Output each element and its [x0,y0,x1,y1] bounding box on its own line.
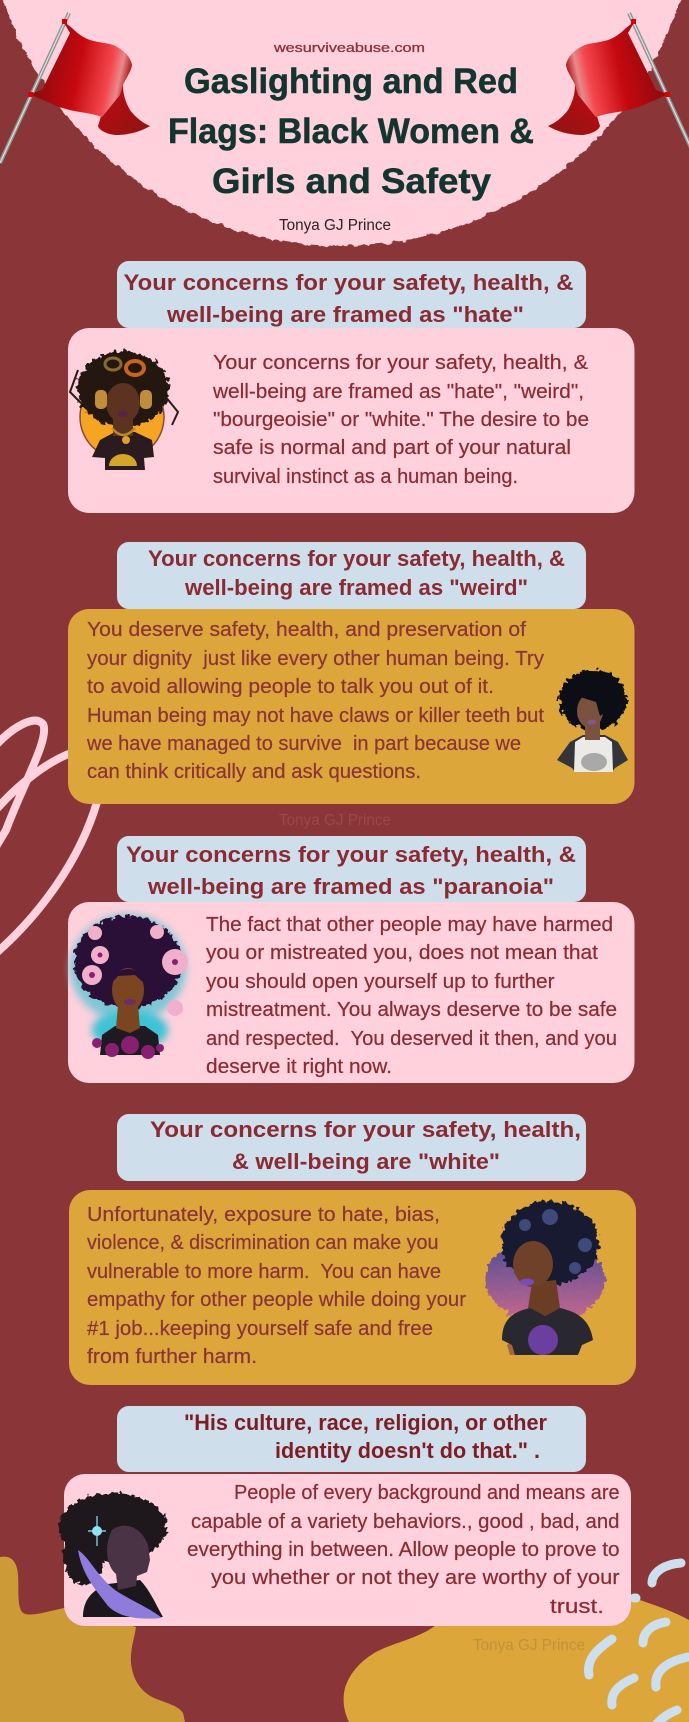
section 5 heading: "His culture, race, religion, or other [184,1410,547,1435]
icon: right red flag [548,13,689,163]
section 4 heading: Your concerns for your safety, health, [150,1117,581,1142]
section 3 text: The fact that other people may have harmed [206,914,613,936]
section 1 text: survival instinct as a human being. [213,466,518,488]
section 2 text: to avoid allowing people to talk you out of it. [87,676,494,698]
section 4 text: from further harm. [87,1346,257,1368]
section 4 panel [69,1190,636,1385]
section 1 heading: well-being are framed as "hate" [166,302,524,327]
section 2 heading [117,542,586,609]
section 5 panel [59,1474,631,1626]
watermark 1: Tonya GJ Prince [279,812,391,829]
section 2 heading: Your concerns for your safety, health, & [148,546,565,571]
title: Flags: Black Women & [168,112,534,151]
section 4 text: vulnerable to more harm. You can have [87,1261,441,1283]
section 4 text: Unfortunately, exposure to hate, bias, [87,1204,440,1226]
section 2 text: we have managed to survive in part because we [86,733,521,755]
section 4 text: #1 job...keeping yourself safe and free [87,1318,433,1340]
section 2 text: can think critically and ask questions. [87,761,421,783]
section 1 portrait [70,351,178,470]
section 1 heading: Your concerns for your safety, health, & [124,270,574,295]
section 1 text [212,352,589,488]
section 4 text: violence, & discrimination can make you [87,1232,438,1254]
section 5 heading: identity doesn't do that." . [275,1438,540,1463]
section 1 text: Your concerns for your safety, health, & [213,352,589,374]
watermark 2: Tonya GJ Prince [473,1637,585,1654]
section 5 heading [117,1406,586,1472]
section 2 text: You deserve safety, health, and preservation of [87,619,526,641]
title: Gaslighting and Red [184,62,518,101]
section 1 text: "bourgeoisie" or "white." The desire to be [213,409,589,431]
section 3 text: deserve it right now. [206,1056,392,1078]
section 3 heading: well-being are framed as "paranoia" [147,874,554,899]
section 4 heading: & well-being are "white" [232,1149,500,1174]
section 4 heading [117,1114,586,1181]
author: Tonya GJ Prince [279,217,391,234]
section 5 text: everything in between. Allow people to prove to [187,1539,620,1561]
section 3 portrait [70,914,188,1059]
section 3 heading: Your concerns for your safety, health, & [126,842,576,867]
section 1 text: well-being are framed as "hate", "weird", [212,381,584,403]
section 5 text: you whether or not they are worthy of your [211,1567,620,1589]
section 5 text: capable of a variety behaviors., good , bad, and [191,1511,620,1533]
title panel: torn pink circle [0,0,689,246]
decorative dashes [588,1563,688,1722]
section 2 text [86,619,544,783]
section 1 text: safe is normal and part of your natural [213,437,571,459]
section 3 heading [117,836,586,902]
section 2 heading: well-being are framed as "weird" [184,575,528,600]
section 3 text: you should open yourself up to further [206,971,555,993]
section 2 portrait [557,670,628,772]
section 3 text: and respected. You deserved it then, and you [206,1028,617,1050]
decorative blob: bottom right [344,1590,689,1722]
section 1 heading [117,261,586,328]
section 3 text: mistreatment. You always deserve to be safe [206,999,617,1021]
section 3 text: you or mistreated you, does not mean that [206,942,598,964]
header text block [168,40,534,234]
section 2 text: your dignity just like every other human being. Try [87,648,544,670]
section 4 portrait [485,1201,605,1355]
section 5 text: trust. [550,1596,604,1618]
title: Girls and Safety [212,162,492,201]
icon: left red flag [0,13,150,163]
website: wesurviveabuse.com [273,40,425,55]
decorative blob: bottom left [0,1557,185,1722]
section 4 text: empathy for other people while doing your [87,1289,466,1311]
section 5 portrait [59,1493,167,1619]
section 5 text [187,1482,620,1618]
section 3 panel [68,902,634,1083]
title [168,62,534,201]
section 1 panel [68,328,634,513]
decorative scribble [0,721,97,955]
section 2 panel [68,609,634,804]
section 2 text: Human being may not have claws or killer teeth but [87,705,544,727]
section 5 text: People of every background and means are [234,1482,620,1504]
section 3 text [206,914,617,1078]
section 4 text [87,1204,466,1368]
